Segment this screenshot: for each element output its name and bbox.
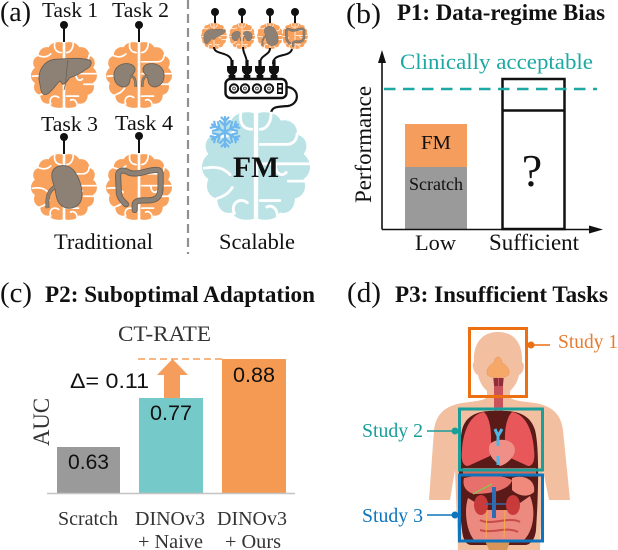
x label: Scratch: Scratch bbox=[58, 508, 118, 530]
heading: P2: P2: Suboptimal Adaptation bbox=[45, 282, 315, 307]
x label: DINOv3 + Ours bbox=[217, 508, 287, 550]
label: Traditional: Traditional bbox=[54, 229, 153, 254]
panel: (b) P1 data-regime bias bbox=[346, 0, 605, 255]
label: FM in bar: FM bbox=[421, 132, 451, 154]
x label: DINOv3 + Ours: DINOv3 bbox=[217, 508, 287, 530]
chart title: CT-RATE: CT-RATE bbox=[118, 321, 211, 346]
bar: DINOv3 Ours 0.88: 0.88 bbox=[233, 364, 275, 387]
callout: Study 2: Study 2 bbox=[362, 420, 423, 442]
axis label: Performance: Performance bbox=[351, 86, 376, 203]
bar: Scratch 0.63: 0.63 bbox=[68, 451, 109, 474]
icon: kidney brain with pin bbox=[31, 133, 97, 220]
label: Task 3: Task 3 bbox=[41, 112, 98, 136]
icon: liver brain with pin bbox=[31, 21, 97, 108]
box: sufficient data bar bbox=[502, 79, 565, 229]
panel: (d) P3 insufficient tasks bbox=[347, 278, 618, 550]
icon: snowflake bbox=[210, 117, 240, 147]
box: Study 2 region bbox=[460, 409, 542, 470]
arrow: improvement bbox=[157, 359, 188, 398]
panel: (c) P2 suboptimal adaptation bbox=[0, 278, 315, 550]
icon: kidneys brain with pin bbox=[106, 21, 172, 108]
callout: Study 3 bbox=[362, 505, 458, 527]
axis label: Low: Low bbox=[415, 230, 457, 255]
axis label: Sufficient: Sufficient bbox=[489, 230, 580, 255]
callout: Study 1: Study 1 bbox=[558, 332, 618, 353]
bar: DINOv3 Naive 0.77: 0.77 bbox=[150, 402, 192, 425]
icon: FM foundation model brain bbox=[202, 112, 310, 220]
label: delta: Δ= 0.11 bbox=[70, 369, 149, 393]
panel label (d): (d) bbox=[347, 278, 381, 309]
axes bbox=[378, 50, 603, 234]
label: Scratch in bar: Scratch bbox=[409, 174, 463, 194]
illustration: human body with organs bbox=[429, 332, 570, 550]
x label: DINOv3 + Naive bbox=[135, 508, 205, 550]
bar: FM bbox=[405, 124, 467, 167]
axis label: AUC: AUC bbox=[29, 398, 54, 446]
heading: P1: P1: Data-regime Bias bbox=[397, 0, 605, 25]
bar: Scratch 0.63 bbox=[57, 447, 120, 493]
label: question mark: ? bbox=[522, 145, 542, 196]
bar: DINOv3 Ours 0.88 bbox=[222, 359, 286, 493]
panel label (c): (c) bbox=[0, 278, 32, 309]
icon: power strip with plugs and cables bbox=[214, 47, 297, 113]
threshold line bbox=[384, 88, 597, 90]
label: Task 4: Task 4 bbox=[115, 111, 174, 135]
box: Study 1 region bbox=[470, 328, 526, 396]
panel: (a) traditional vs scalable bbox=[0, 0, 310, 254]
bar: Scratch bbox=[405, 167, 467, 229]
icon: small task brains bbox=[201, 8, 308, 49]
bar: DINOv3 Naive 0.77 bbox=[139, 398, 203, 493]
label: Clinically acceptable: Clinically acceptable bbox=[400, 49, 593, 74]
x label: DINOv3 + Naive: DINOv3 bbox=[135, 508, 205, 530]
label: FM: FM bbox=[233, 152, 279, 184]
callout: Study 2 bbox=[362, 420, 458, 442]
callout: Study 3: Study 3 bbox=[362, 505, 423, 527]
callout: Study 1 bbox=[528, 332, 618, 353]
label: Scalable: Scalable bbox=[219, 229, 295, 254]
heading: P3: P3: Insufficient Tasks bbox=[395, 282, 608, 308]
box: Study 3 region bbox=[460, 475, 542, 541]
icon: colon brain with pin bbox=[106, 132, 172, 220]
